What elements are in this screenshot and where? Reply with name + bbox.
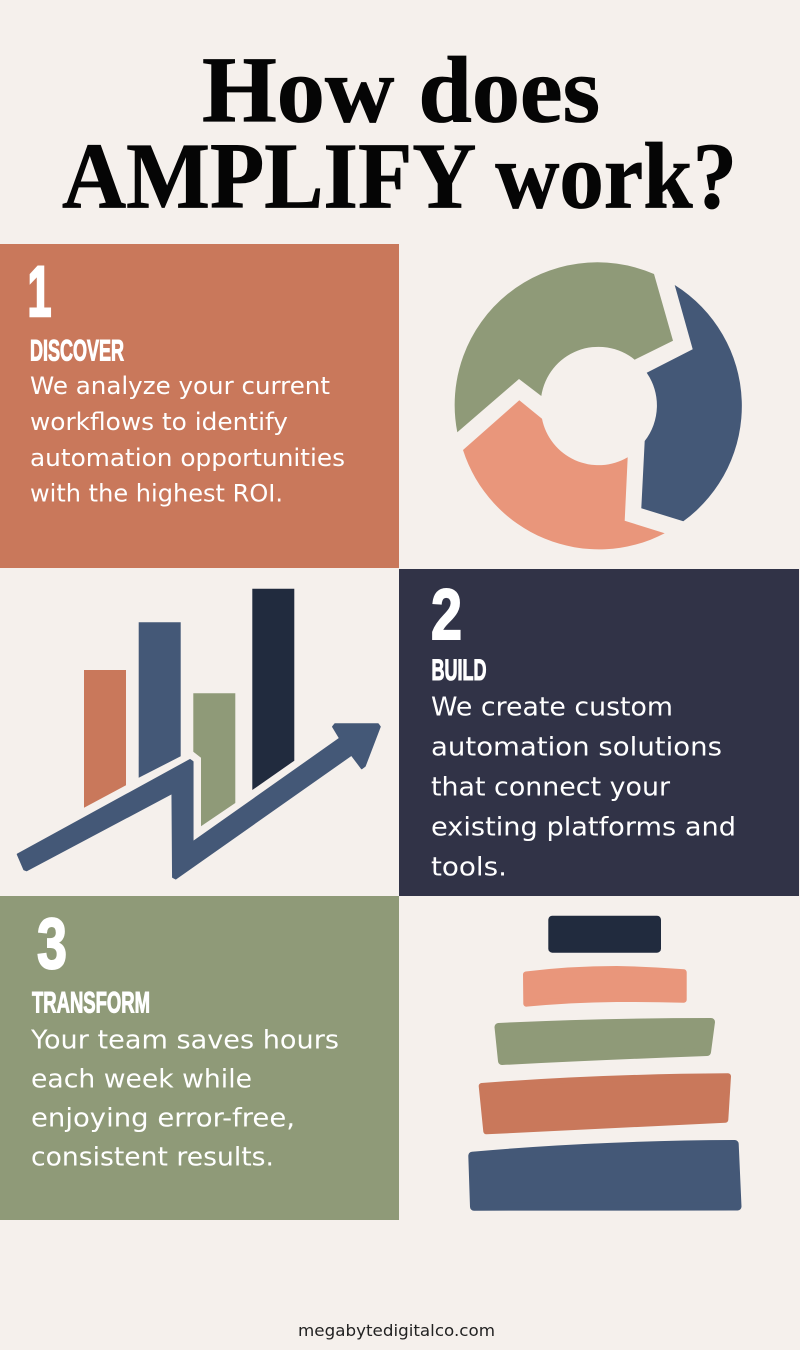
- step number 2: 2: [431, 576, 462, 655]
- bar: orange: [84, 670, 126, 808]
- footer: website: megabytedigitalco.com: [298, 1321, 495, 1340]
- cycle segment: green: [455, 262, 673, 432]
- layer: blue: [472, 1144, 738, 1207]
- arrow: rising zigzag: [18, 724, 380, 879]
- text: build description: existing platforms and: [431, 813, 736, 843]
- panel: step 1 discover: [0, 244, 399, 568]
- text: discover description: workflows to identify: [30, 408, 288, 436]
- layer: navy: [548, 916, 661, 953]
- icon: circular cycle arrows: [455, 262, 742, 549]
- text: build description: tools.: [431, 853, 507, 883]
- panel: step 2 build: [399, 569, 799, 896]
- bar: navy: [252, 589, 294, 790]
- title: How does: [202, 38, 600, 142]
- text: discover description: We analyze your current: [30, 372, 330, 400]
- text: build description: automation solutions: [431, 733, 722, 763]
- text: build description: [431, 693, 736, 883]
- cycle segment: salmon: [463, 400, 665, 549]
- text: transform description: Your team saves hours: [30, 1025, 339, 1055]
- icon: bar chart with rising arrow: [18, 589, 380, 879]
- title: [62, 38, 737, 228]
- layer: green: [498, 1022, 711, 1061]
- icon: stacked layers pyramid: [472, 916, 738, 1207]
- heading: discover: DISCOVER: [30, 334, 124, 367]
- text: discover description: automation opportunities: [30, 444, 345, 472]
- text: transform description: each week while: [31, 1064, 252, 1094]
- step number 3: 3: [37, 905, 67, 984]
- layer: orange: [482, 1076, 728, 1131]
- text: transform description: enjoying error-free,: [31, 1103, 295, 1133]
- step number 1: 1: [28, 253, 52, 332]
- layer: salmon: [526, 969, 684, 1004]
- text: build description: that connect your: [431, 773, 670, 803]
- text: discover description: with the highest ROI.: [30, 480, 283, 508]
- text: transform description: [30, 1025, 339, 1172]
- text: discover description: [30, 372, 345, 508]
- cycle segment: blue: [641, 285, 742, 521]
- panel: step 3 transform: [0, 896, 399, 1220]
- text: build description: We create custom: [431, 693, 673, 723]
- bar: blue: [139, 622, 181, 778]
- heading: build: BUILD: [432, 654, 486, 687]
- text: transform description: consistent results.: [31, 1142, 274, 1172]
- heading: transform: TRANSFORM: [32, 986, 150, 1019]
- title: AMPLIFY work?: [62, 124, 737, 228]
- bar: green: [193, 693, 235, 826]
